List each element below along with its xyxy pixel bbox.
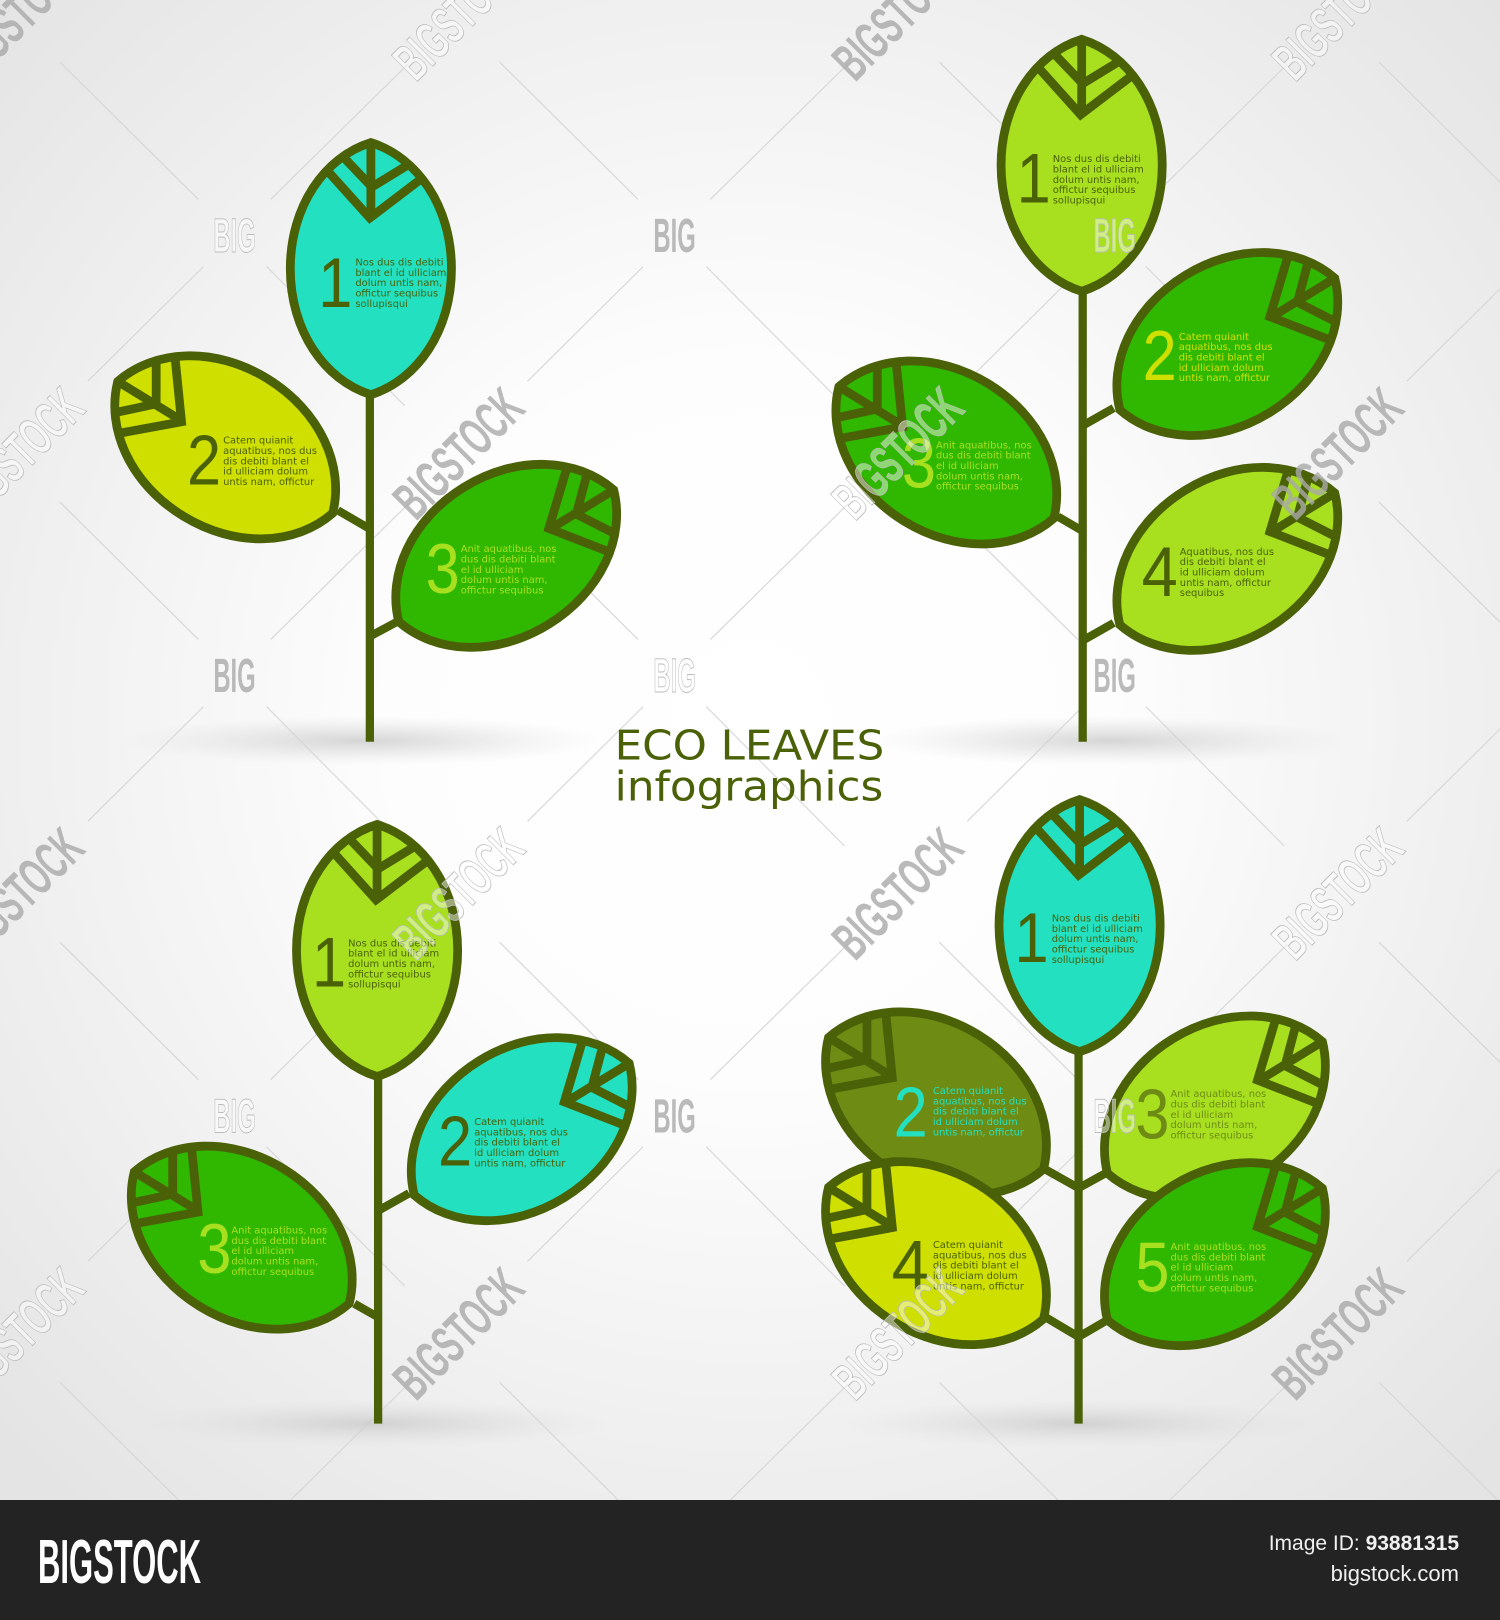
- leaf 4 yellow-green: [821, 1157, 1051, 1349]
- text: BIG: [1094, 209, 1136, 263]
- stem and branches: [1058, 291, 1114, 742]
- leaf 3 light green: 3: [1135, 1074, 1169, 1153]
- leaf 5 green: Anit aquatibus, nos: [1171, 1242, 1266, 1253]
- leaf 1 turquoise: offictur sequibus: [1052, 945, 1134, 956]
- leaf 1 turquoise: [999, 798, 1160, 1052]
- leaf 3 green: el id ulliciam: [936, 461, 999, 472]
- watermarks: BIG: [213, 209, 1136, 1143]
- leaf 2 turquoise: [406, 1033, 637, 1226]
- title: [615, 721, 884, 811]
- leaf 3 green: dolum untis nam,: [461, 575, 548, 586]
- leaf 1 light green: [296, 822, 458, 1076]
- ground shadow: plant 1: [119, 716, 604, 766]
- image id: Image ID: 93881315: [1269, 1532, 1459, 1555]
- leaf 2 olive: aquatibus, nos dus: [933, 1096, 1027, 1107]
- ground shadow: plant 4: [837, 1399, 1322, 1448]
- leaf 3 green: el id ulliciam: [231, 1246, 294, 1257]
- leaf 3 light green: dus dis debiti blant: [1171, 1099, 1265, 1110]
- leaf 2 yellow-green: id ulliciam dolum: [223, 467, 308, 478]
- leaf 2 olive: 2: [894, 1072, 928, 1151]
- leaf 1 light green: Nos dus dis debiti: [348, 938, 436, 949]
- text: BIG: [1094, 1089, 1136, 1143]
- leaf 4 yellow-green: Catem quianit: [933, 1240, 1003, 1251]
- leaf 2 green: [1112, 248, 1342, 440]
- leaf 4 light green: untis nam, offictur: [1180, 578, 1272, 589]
- watermarks: BIGSTOCK: BIGSTOCK: [382, 1257, 536, 1411]
- leaf 3 green: 3: [197, 1209, 231, 1288]
- leaf 2 turquoise: 2: [438, 1101, 472, 1180]
- watermarks: BIGSTOCK: BIGSTOCK: [821, 377, 975, 530]
- leaf 1 turquoise: sollupisqui: [1052, 955, 1104, 966]
- stem and branches: [354, 1076, 409, 1424]
- title: ECO LEAVES: [615, 721, 884, 769]
- watermarks: BIGSTOCK: BIGSTOCK: [821, 817, 975, 970]
- leaf 4 light green: 4: [1142, 532, 1178, 611]
- watermarks: BIGSTOCK: BIGSTOCK: [382, 817, 536, 970]
- leaf 4 yellow-green: id ulliciam dolum: [933, 1271, 1018, 1282]
- leaf 2 turquoise: Catem quianit: [474, 1117, 544, 1128]
- leaf 1 light green: offictur sequibus: [348, 969, 431, 980]
- leaf 2 green: aquatibus, nos dus: [1179, 342, 1273, 353]
- leaf 1 light green: 1: [312, 923, 346, 1002]
- leaf 2 green: 2: [1143, 316, 1177, 395]
- watermarks: BIG: BIG: [213, 649, 256, 703]
- leaf 1 light green: blant el id ulliciam: [348, 949, 439, 960]
- leaf 3 green: offictur sequibus: [231, 1267, 314, 1278]
- leaf 2 yellow-green: [110, 351, 340, 544]
- leaf 2 yellow-green: 2: [187, 421, 221, 500]
- leaf 3 green: dus dis debiti blant: [231, 1236, 326, 1247]
- leaf 3 green: 3: [902, 424, 936, 503]
- leaf 3 green: dus dis debiti blant: [936, 451, 1031, 462]
- leaf 1 light green: Nos dus dis debiti: [1053, 154, 1141, 165]
- leaf 4 light green: dis debiti blant el: [1180, 557, 1266, 568]
- watermarks: BIGSTOCK: BIGSTOCK: [1261, 377, 1415, 530]
- leaf 4 light green: Aquatibus, nos dus: [1180, 547, 1274, 558]
- leaf 3 green: 3: [426, 529, 460, 608]
- title: infographics: [615, 763, 883, 811]
- leaf 2 green: Catem quianit: [1179, 332, 1249, 343]
- watermarks: BIG: BIG: [213, 209, 256, 263]
- watermarks: BIGSTOCK: BIGSTOCK: [821, 1257, 975, 1411]
- leaf 1 light green: offictur sequibus: [1053, 185, 1136, 196]
- leaf 2 turquoise: aquatibus, nos dus: [474, 1127, 568, 1138]
- watermarks: BIG: BIG: [653, 1089, 696, 1143]
- leaf 1 turquoise: 1: [1015, 898, 1049, 977]
- leaf 2 olive: id ulliciam dolum: [933, 1117, 1018, 1128]
- leaf 3 green: Anit aquatibus, nos: [461, 544, 556, 555]
- leaf 5 green: dus dis debiti blant: [1171, 1252, 1265, 1263]
- leaf 2 olive: untis nam, offictur: [933, 1127, 1025, 1138]
- watermarks: BIG: BIG: [213, 1089, 256, 1143]
- leaf 4 light green: [1112, 463, 1342, 655]
- leaf 3 light green: Anit aquatibus, nos: [1171, 1089, 1266, 1100]
- leaf 2 green: untis nam, offictur: [1179, 373, 1271, 384]
- leaf 2 yellow-green: untis nam, offictur: [223, 477, 315, 488]
- leaf 1 turquoise: blant el id ulliciam: [1052, 924, 1143, 935]
- leaf 4 yellow-green: untis nam, offictur: [933, 1281, 1025, 1292]
- leaf 1 turquoise: dolum untis nam,: [355, 278, 442, 289]
- leaf 4 yellow-green: 4: [892, 1225, 929, 1304]
- leaf 2 green: id ulliciam dolum: [1179, 363, 1264, 374]
- leaf 5 green: [1100, 1158, 1330, 1350]
- leaf 3 green: [391, 460, 622, 652]
- watermarks: BIGSTOCK: BIGSTOCK: [1261, 1257, 1415, 1411]
- leaf 1 light green: [1001, 37, 1162, 291]
- leaf 2 olive: Catem quianit: [933, 1086, 1003, 1097]
- leaf 2 turquoise: dis debiti blant el: [474, 1138, 560, 1149]
- leaf 1 light green: 1: [1017, 138, 1051, 217]
- leaf 3 green: Anit aquatibus, nos: [936, 440, 1032, 451]
- leaf 3 light green: [1100, 1012, 1330, 1199]
- leaf 4 yellow-green: dis debiti blant el: [933, 1261, 1019, 1272]
- leaf 2 yellow-green: aquatibus, nos dus: [223, 446, 317, 457]
- leaf 5 green: offictur sequibus: [1171, 1283, 1253, 1294]
- leaf 4 light green: sequibus: [1180, 588, 1224, 599]
- leaf 1 light green: dolum untis nam,: [1053, 175, 1140, 186]
- stem and branches: [1045, 1050, 1111, 1424]
- footer bar: [0, 1500, 1500, 1620]
- stem and branches: [338, 395, 397, 742]
- ground shadow: plant 3: [129, 1399, 615, 1448]
- leaf 1 light green: dolum untis nam,: [348, 959, 435, 970]
- leaf 1 turquoise: 1: [318, 243, 352, 322]
- leaf 3 green: offictur sequibus: [461, 586, 544, 597]
- leaf 3 green: dus dis debiti blant: [461, 555, 556, 566]
- watermarks: BIG: BIG: [653, 209, 696, 263]
- leaf 1 turquoise: dolum untis nam,: [1052, 934, 1139, 945]
- leaf 1 turquoise: sollupisqui: [355, 299, 408, 310]
- leaf 3 green: [831, 356, 1062, 548]
- leaf 1 light green: sollupisqui: [1053, 196, 1105, 207]
- leaf 3 green: Anit aquatibus, nos: [231, 1226, 327, 1237]
- text: BIG: [1094, 649, 1136, 703]
- leaf 3 green: dolum untis nam,: [936, 471, 1023, 482]
- footer logo: BIGSTOCK: [38, 1528, 201, 1597]
- leaf 2 turquoise: untis nam, offictur: [474, 1158, 566, 1169]
- plant 4: five leaves: [785, 798, 1366, 1424]
- leaf 3 light green: el id ulliciam: [1171, 1110, 1233, 1121]
- leaf 4 light green: id ulliciam dolum: [1180, 567, 1265, 578]
- leaf 2 olive: [821, 1008, 1051, 1196]
- leaf 1 light green: blant el id ulliciam: [1053, 165, 1144, 176]
- website: bigstock.com: [1331, 1561, 1459, 1586]
- leaf 2 yellow-green: dis debiti blant el: [223, 456, 309, 467]
- leaf 2 turquoise: id ulliciam dolum: [474, 1148, 559, 1159]
- leaf 2 olive: dis debiti blant el: [933, 1107, 1019, 1118]
- leaf 1 turquoise: Nos dus dis debiti: [355, 258, 443, 269]
- leaf 3 green: offictur sequibus: [936, 482, 1019, 493]
- leaf 2 green: dis debiti blant el: [1179, 353, 1265, 364]
- leaf 5 green: dolum untis nam,: [1171, 1273, 1257, 1284]
- leaf 3 green: [126, 1142, 357, 1334]
- leaf 3 green: dolum untis nam,: [231, 1257, 318, 1268]
- leaf 1 turquoise: [290, 141, 451, 395]
- leaf 3 green: el id ulliciam: [461, 565, 523, 576]
- watermarks: BIGSTOCK: BIGSTOCK: [382, 377, 536, 530]
- leaf 5 green: 5: [1135, 1227, 1169, 1306]
- leaf 3 light green: offictur sequibus: [1171, 1130, 1253, 1141]
- plant 2: four leaves: [795, 37, 1379, 742]
- leaf 2 yellow-green: Catem quianit: [223, 436, 293, 447]
- leaf 1 light green: sollupisqui: [348, 980, 401, 991]
- leaf 5 green: el id ulliciam: [1171, 1263, 1233, 1274]
- leaf 4 yellow-green: aquatibus, nos dus: [933, 1250, 1027, 1261]
- leaf 1 turquoise: blant el id ulliciam: [355, 268, 446, 279]
- plant 1: three leaves: [110, 138, 622, 742]
- watermarks: BIG: BIG: [653, 649, 696, 703]
- leaf 3 light green: dolum untis nam,: [1171, 1120, 1257, 1131]
- ground shadow: plant 2: [868, 716, 1353, 766]
- leaf 1 turquoise: offictur sequibus: [355, 288, 438, 299]
- watermarks: BIGSTOCK: BIGSTOCK: [1261, 817, 1415, 970]
- leaf 1 turquoise: Nos dus dis debiti: [1052, 914, 1140, 925]
- plant 3: three leaves: [126, 820, 637, 1424]
